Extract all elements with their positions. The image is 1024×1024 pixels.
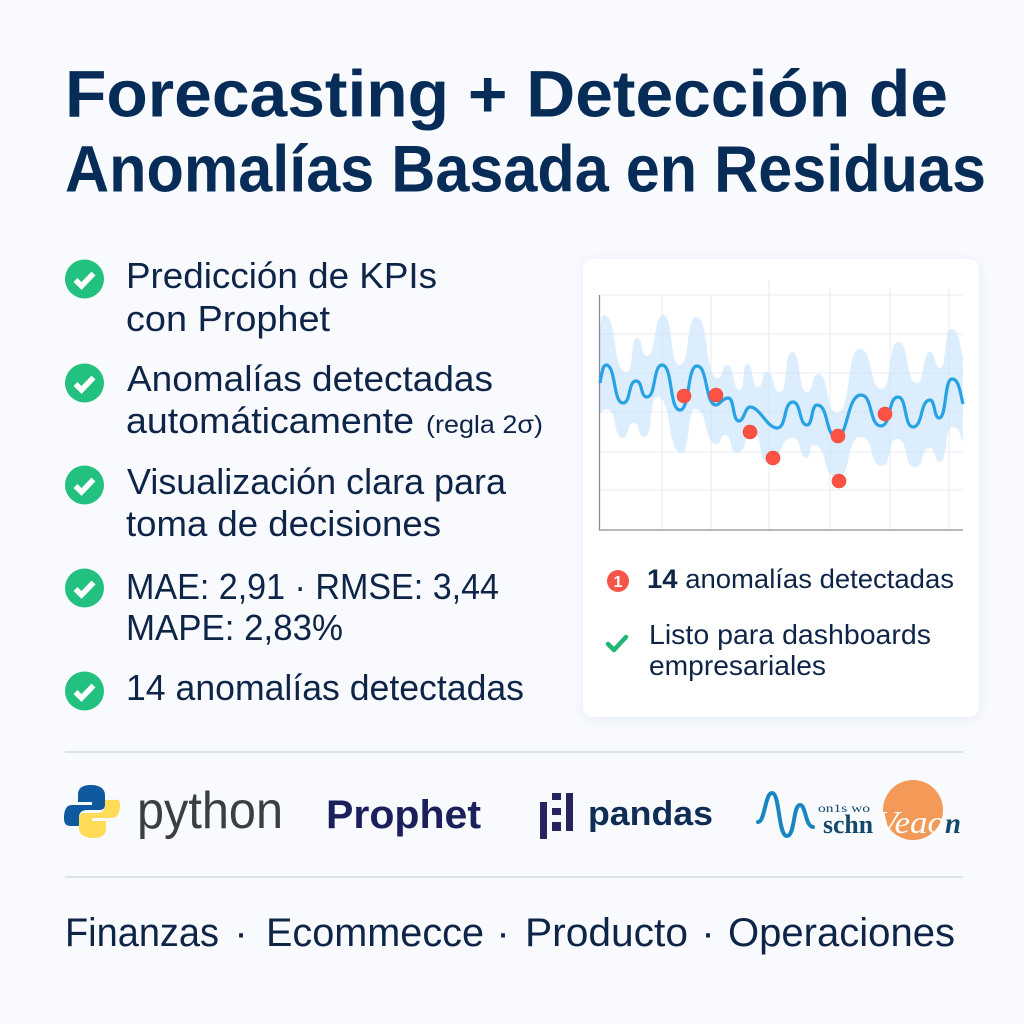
title	[65, 56, 986, 206]
forecast confidence band	[600, 315, 963, 477]
item: error metrics	[65, 566, 499, 648]
title: Forecasting + Detección de	[65, 56, 948, 130]
use cases row: Ecommecce	[266, 911, 484, 955]
callout: dashboards ready	[608, 619, 931, 681]
logo: seaborn-like mark	[758, 780, 961, 840]
use cases row: Operaciones	[728, 911, 955, 955]
logo: seaborn-like mark: on1s wo	[818, 801, 870, 815]
line chart with anomalies	[600, 280, 963, 530]
item: error metrics: MAPE: 2,83%	[126, 607, 343, 648]
use cases row: ·	[234, 911, 248, 955]
use cases row: ·	[496, 911, 510, 955]
item: KPI prediction	[65, 255, 437, 339]
item: error metrics: MAE: 2,91 · RMSE: 3,44	[126, 566, 499, 607]
item: automatic anomalies: Anomalías detectadas	[127, 358, 493, 399]
item: anomaly count: 14 anomalías detectadas	[126, 667, 524, 708]
item: automatic anomalies	[65, 358, 543, 441]
callout: anomaly count: 14 anomalías detectadas	[647, 564, 954, 594]
item: KPI prediction: Predicción de KPIs	[126, 255, 437, 296]
forecast line	[600, 365, 963, 437]
use cases row: Producto	[525, 911, 688, 955]
use cases row	[65, 911, 955, 955]
item: KPI prediction: con Prophet	[126, 298, 330, 339]
logo: seaborn-like mark: n	[945, 807, 961, 840]
logo: pandas	[540, 793, 713, 839]
callout: dashboards ready: empresariales	[649, 650, 826, 681]
item: clear visualization: toma de decisiones	[126, 503, 441, 544]
use cases row: ·	[701, 911, 715, 955]
callout: dashboards ready: Listo para dashboards	[649, 619, 931, 650]
panel: benefits checklist	[65, 255, 543, 710]
use cases row: Finanzas	[65, 911, 219, 955]
logo: python	[64, 782, 283, 840]
logo: python: python	[137, 782, 283, 840]
item: clear visualization	[65, 461, 507, 544]
item: automatic anomalies: (regla 2σ)	[426, 411, 543, 439]
callout: anomaly count: 1	[614, 574, 623, 591]
logo: pandas: pandas	[588, 795, 713, 833]
logo: seaborn-like mark: Veao	[877, 804, 945, 840]
item: automatic anomalies: automáticamente	[126, 400, 414, 441]
logo: prophet: Prophet	[326, 793, 481, 837]
panel: chart card	[583, 259, 979, 717]
anomaly points	[677, 388, 892, 488]
item: clear visualization: Visualización clara para	[127, 461, 507, 502]
logo row	[64, 780, 961, 840]
chart axes	[600, 295, 963, 530]
logo: seaborn-like mark: schn	[823, 810, 874, 839]
